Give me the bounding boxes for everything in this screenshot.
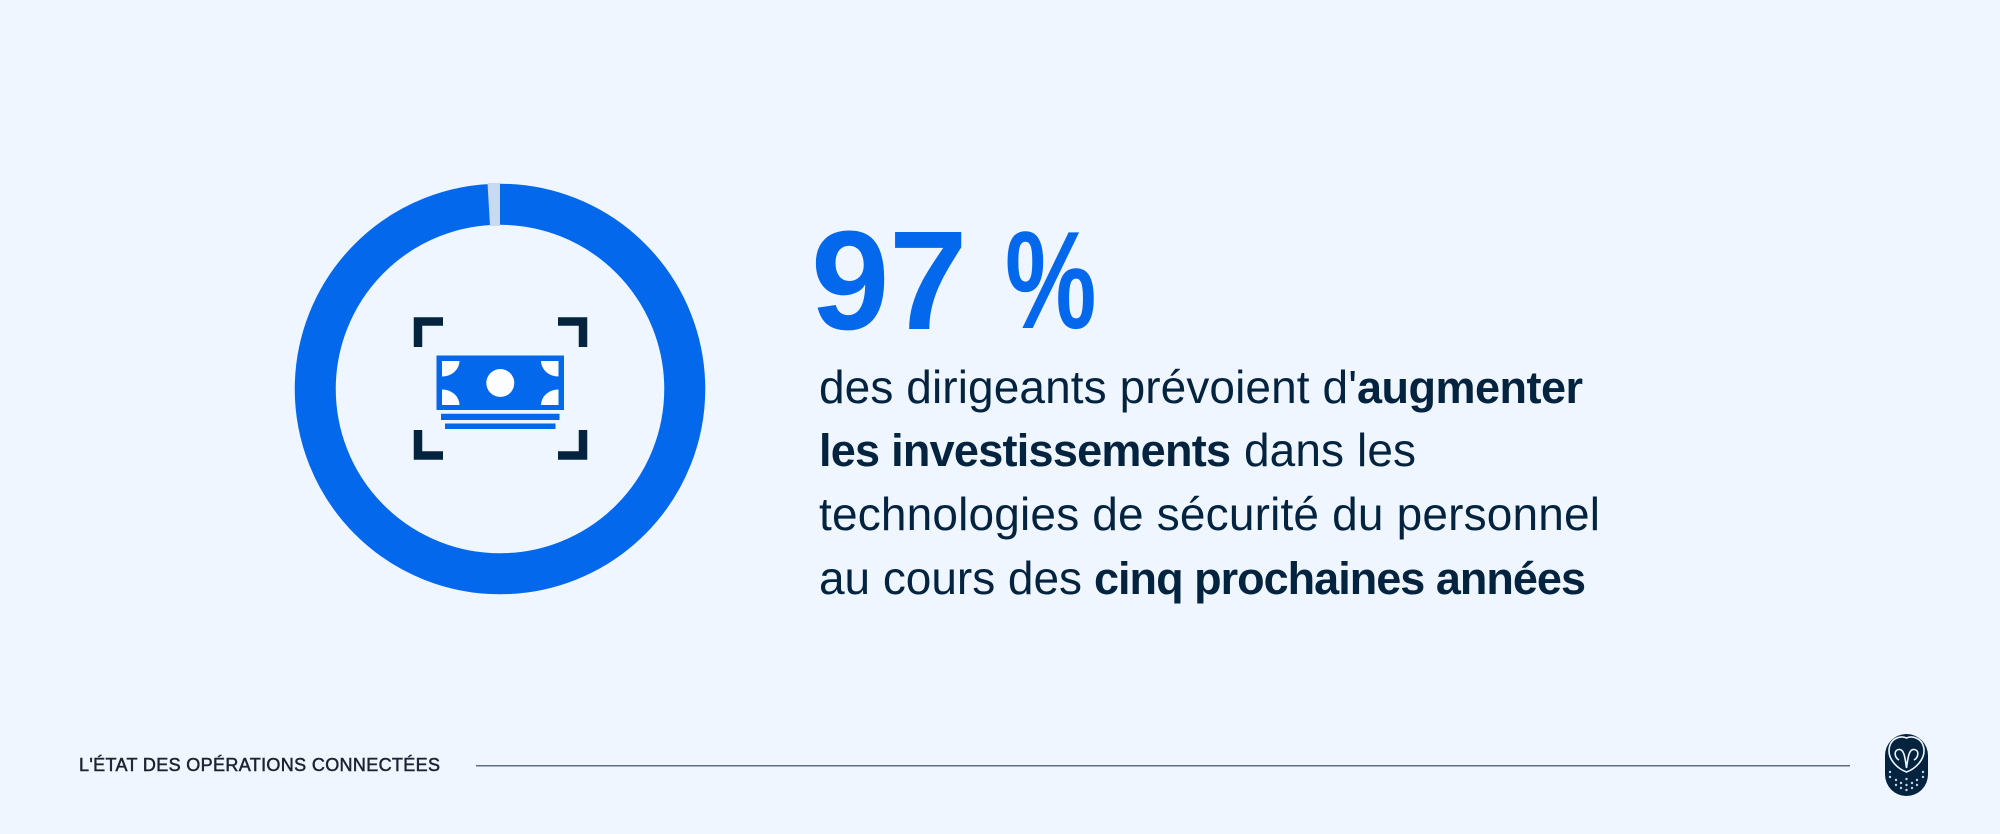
line 2: dans les <box>1244 424 1416 476</box>
big number <box>811 201 1096 359</box>
icon banknote <box>436 356 564 410</box>
line 3: technologies de sécurité du personnel <box>819 488 1600 540</box>
line 4: cinq prochaines années <box>1094 553 1586 604</box>
big number: 9 <box>811 201 889 359</box>
donut chart: 97 % <box>315 183 685 574</box>
footer rule <box>476 765 1850 766</box>
text block: description <box>819 361 1600 604</box>
big number: % <box>1005 202 1096 358</box>
big number: 7 <box>889 201 967 359</box>
line 4: au cours des <box>819 552 1082 604</box>
icon frame corners <box>418 322 583 456</box>
line 1: des dirigeants prévoient d' <box>819 361 1357 413</box>
donut remainder segment <box>488 183 500 226</box>
icon: owl logo <box>1885 734 1928 796</box>
line 1: augmenter <box>1357 362 1583 413</box>
footer label: L'ÉTAT DES OPÉRATIONS CONNECTÉES <box>79 755 440 775</box>
icon: banknotes in frame <box>418 322 583 456</box>
line 2: les investissements <box>819 425 1231 476</box>
icon stacked notes <box>441 414 560 429</box>
